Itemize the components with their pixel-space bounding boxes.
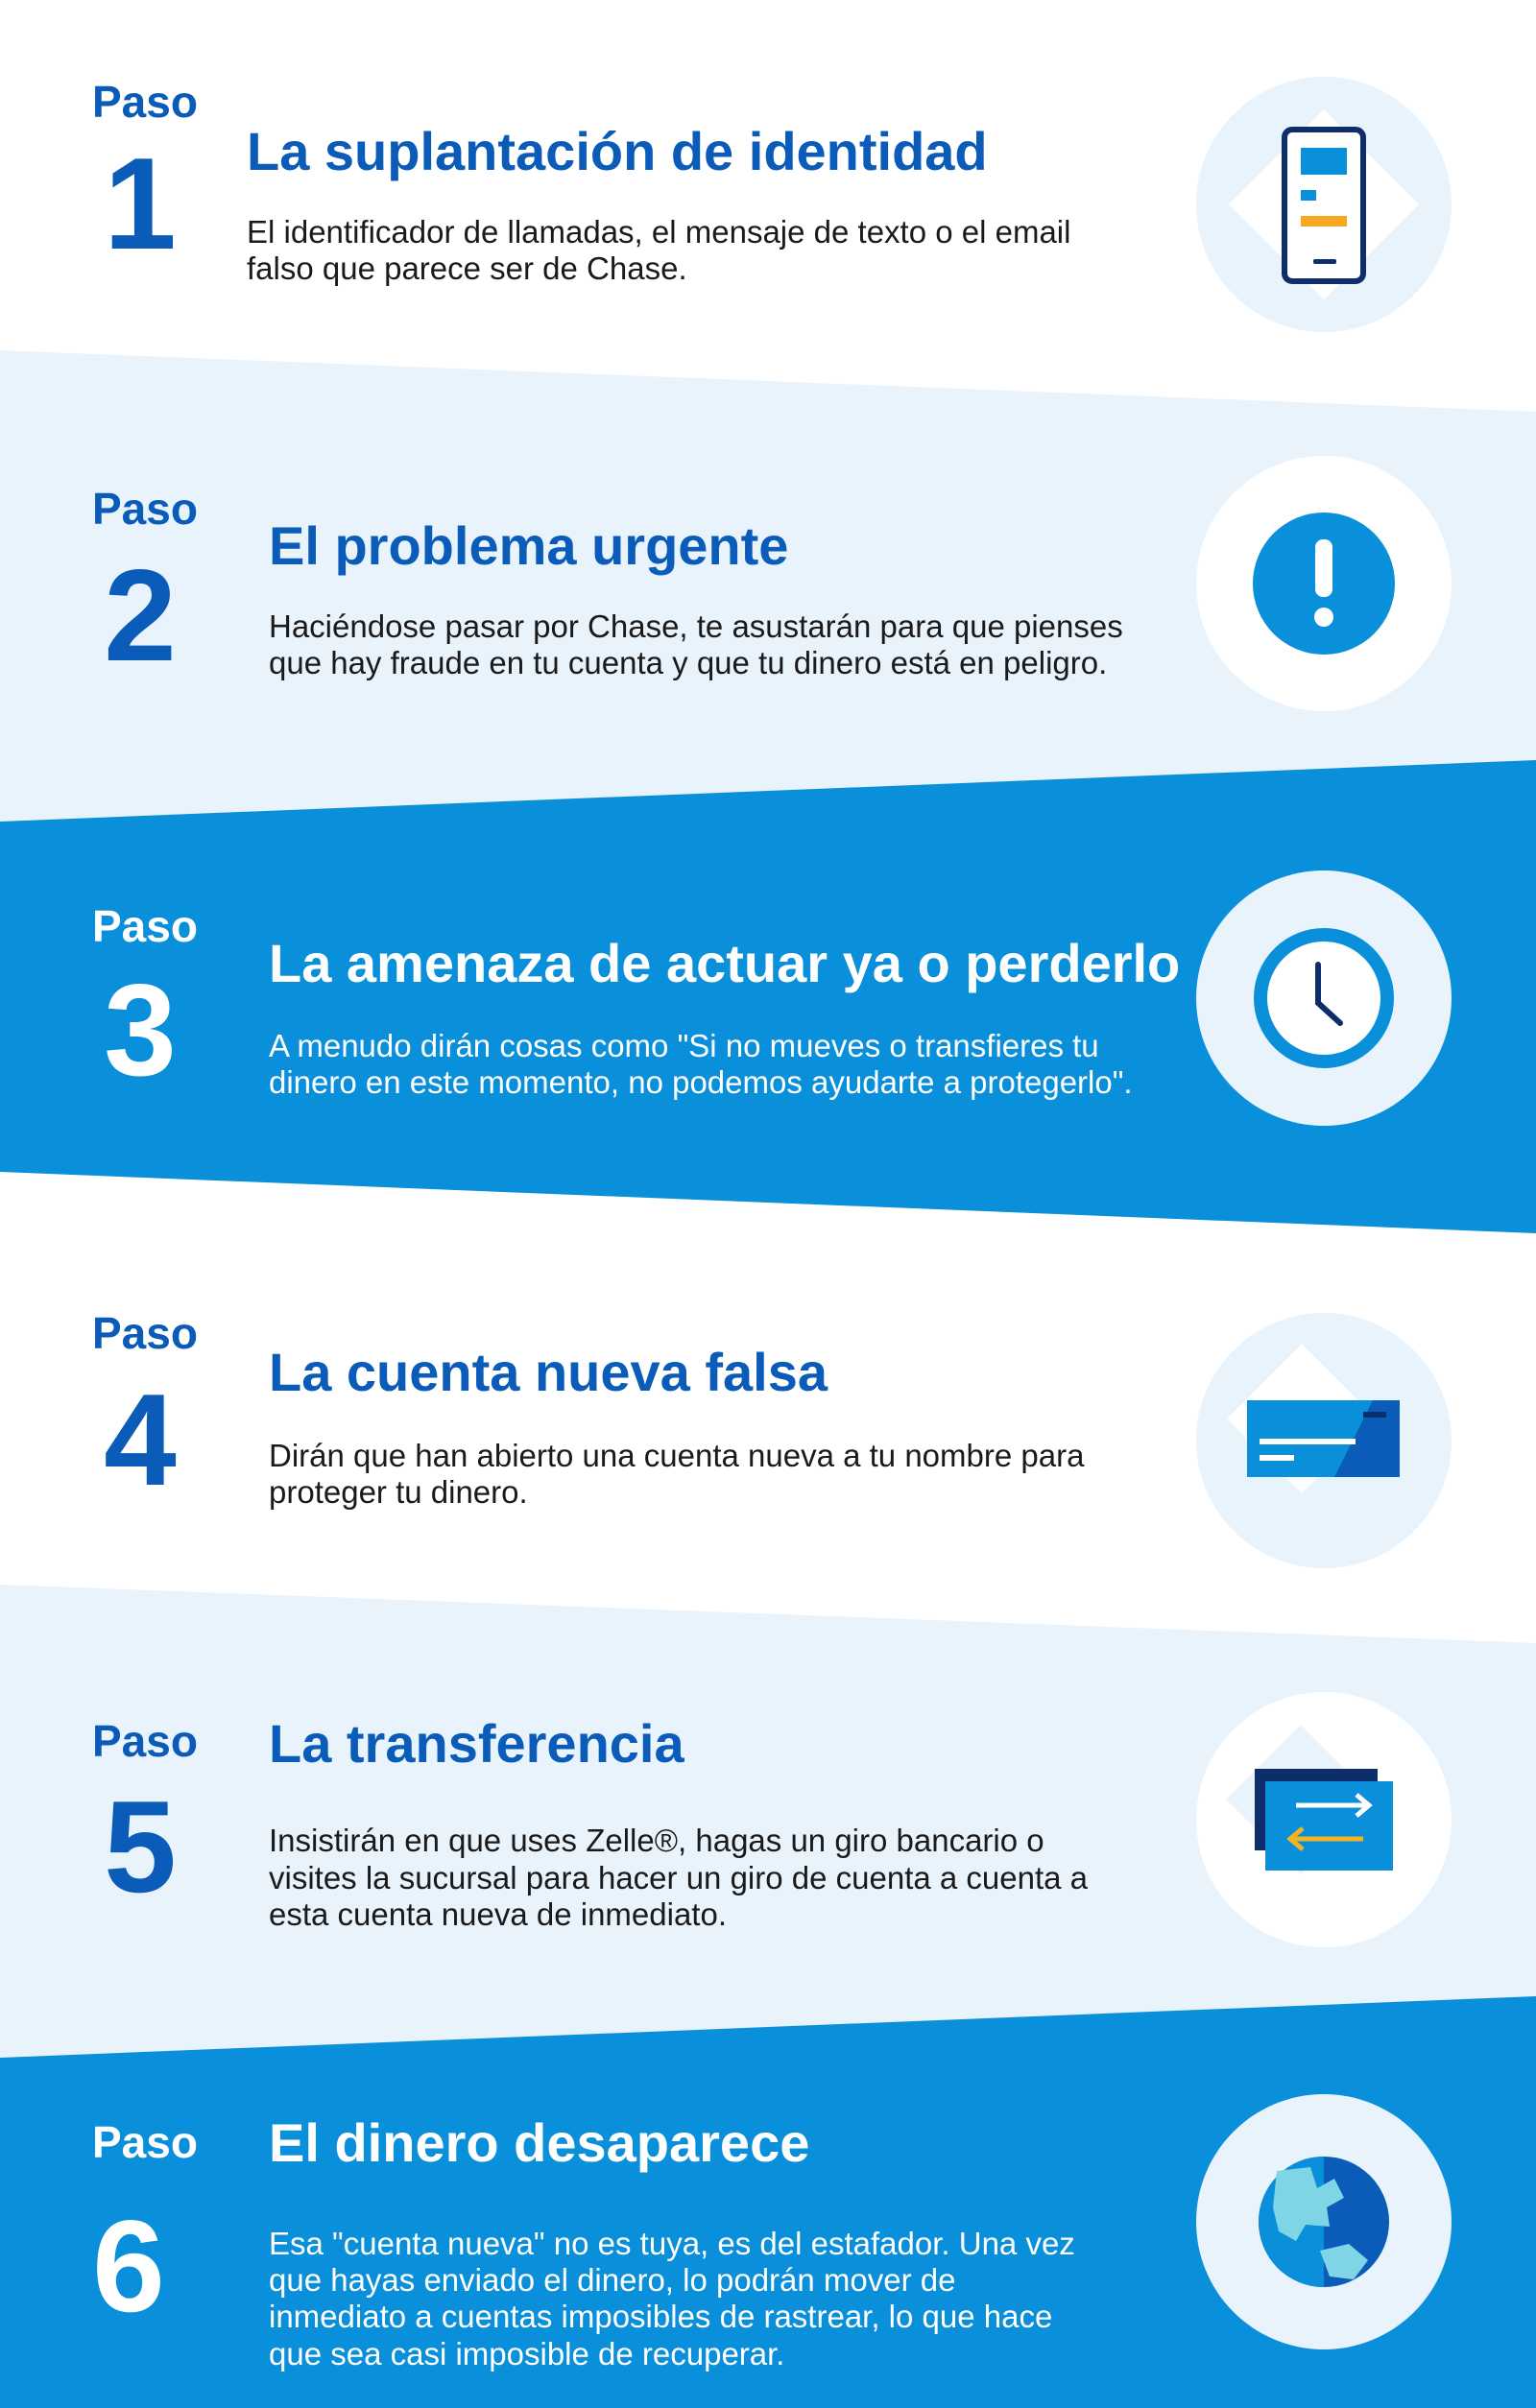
step 4 number: 4 xyxy=(104,1367,177,1513)
step 6 label: Paso xyxy=(92,2117,198,2167)
step 6 xyxy=(92,2094,1452,2372)
step 5 body: esta cuenta nueva de inmediato. xyxy=(269,1896,727,1932)
step 5 label: Paso xyxy=(92,1716,198,1766)
step 5 body: Insistirán en que uses Zelle®, hagas un giro bancario o xyxy=(269,1823,1044,1858)
step 6 title: El dinero desaparece xyxy=(269,2112,809,2173)
step 5 number: 5 xyxy=(104,1774,177,1919)
step 2 body: Haciéndose pasar por Chase, te asustarán para que pienses xyxy=(269,608,1123,644)
step 5 xyxy=(92,1692,1452,1947)
step 4 body: proteger tu dinero. xyxy=(269,1474,528,1510)
icon: transfer xyxy=(1196,1692,1452,1947)
step 4 body: Dirán que han abierto una cuenta nueva a tu nombre para xyxy=(269,1438,1085,1473)
step 4 label: Paso xyxy=(92,1308,198,1358)
step 2 number: 2 xyxy=(104,542,177,688)
step 3 title: La amenaza de actuar ya o perderlo xyxy=(269,933,1180,993)
step 3 number: 3 xyxy=(104,957,177,1103)
icon: alert xyxy=(1196,456,1452,711)
step 1 body: El identificador de llamadas, el mensaje de texto o el email xyxy=(247,214,1070,250)
step 1 label: Paso xyxy=(92,77,198,127)
step 1 xyxy=(92,77,1452,332)
step 3 label: Paso xyxy=(92,901,198,951)
step 1 body: falso que parece ser de Chase. xyxy=(247,250,687,286)
step 6 body: que sea casi imposible de recuperar. xyxy=(269,2336,784,2372)
step 4 xyxy=(92,1308,1452,1568)
step 4 title: La cuenta nueva falsa xyxy=(269,1342,828,1402)
step 3 xyxy=(92,870,1452,1126)
step 2 label: Paso xyxy=(92,484,198,534)
step 5 title: La transferencia xyxy=(269,1713,684,1774)
step 6 body: inmediato a cuentas imposibles de rastrear, lo que hace xyxy=(269,2299,1052,2334)
icon: globe xyxy=(1196,2094,1452,2349)
step 5 body: visites la sucursal para hacer un giro de cuenta a cuenta a xyxy=(269,1860,1089,1895)
icon: phone xyxy=(1196,77,1452,332)
step 6 body: que hayas enviado el dinero, lo podrán mover de xyxy=(269,2262,955,2298)
step 1 number: 1 xyxy=(104,131,177,276)
step 6 body: Esa "cuenta nueva" no es tuya, es del estafador. Una vez xyxy=(269,2226,1075,2261)
step 2 xyxy=(92,456,1452,711)
step 2 title: El problema urgente xyxy=(269,515,788,576)
step 2 body: que hay fraude en tu cuenta y que tu dinero está en peligro. xyxy=(269,645,1107,680)
step 3 body: dinero en este momento, no podemos ayudarte a protegerlo". xyxy=(269,1064,1133,1100)
step 3 body: A menudo dirán cosas como "Si no mueves o transfieres tu xyxy=(269,1028,1099,1063)
icon: card xyxy=(1196,1313,1452,1568)
icon: clock xyxy=(1196,870,1452,1126)
step 6 number: 6 xyxy=(92,2193,165,2339)
step 1 title: La suplantación de identidad xyxy=(247,121,988,181)
